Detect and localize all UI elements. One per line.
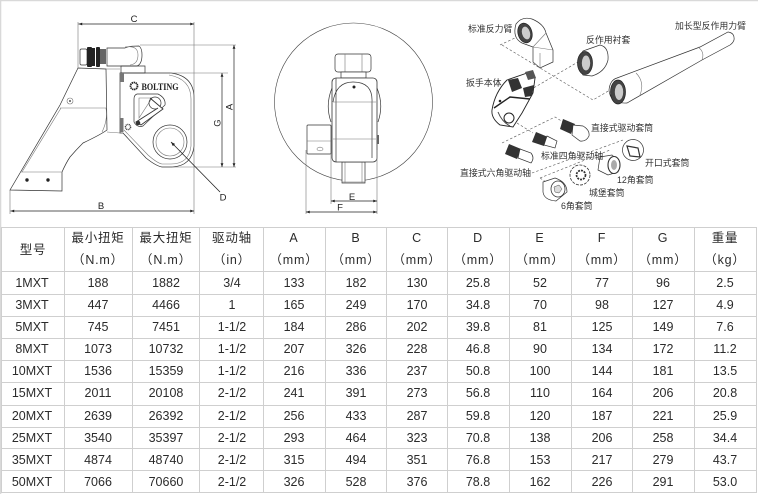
- side view drawing with swing circle: [274, 23, 432, 214]
- row 15MXT: 2-1/2: [218, 386, 246, 400]
- drive ring: [153, 125, 187, 159]
- row 20MXT: 256: [284, 409, 304, 423]
- row 8MXT: 1073: [84, 342, 112, 356]
- row 20MXT: 26392: [149, 409, 183, 423]
- table header: （mm）: [392, 253, 442, 267]
- row 15MXT: 391: [346, 386, 366, 400]
- part labels: 标准反力臂: [468, 23, 512, 34]
- table header: A: [289, 231, 299, 245]
- row 15MXT: 206: [653, 386, 673, 400]
- exploded parts diagram: [460, 18, 746, 211]
- row 35MXT: 315: [284, 453, 304, 467]
- row 3MXT: 165: [284, 298, 304, 312]
- row 15MXT: 15MXT: [12, 386, 53, 400]
- table header: [20, 230, 746, 267]
- row 25MXT: [12, 431, 737, 445]
- row 8MXT: [15, 342, 737, 356]
- row 1MXT: 96: [656, 276, 670, 290]
- row 5MXT: 39.8: [466, 320, 490, 334]
- row 25MXT: 25MXT: [12, 431, 53, 445]
- row 8MXT: 1-1/2: [218, 342, 246, 356]
- row 8MXT: 207: [284, 342, 304, 356]
- row 35MXT: 351: [407, 453, 427, 467]
- ratchet window: [125, 94, 165, 130]
- row 5MXT: 149: [653, 320, 673, 334]
- row 20MXT: 221: [653, 409, 673, 423]
- row 50MXT: 291: [653, 475, 673, 489]
- row 20MXT: 25.9: [713, 409, 737, 423]
- row 3MXT: [15, 298, 734, 312]
- side view dimensions: [306, 150, 377, 214]
- row 35MXT: 217: [592, 453, 612, 467]
- side view labels: E: [349, 192, 355, 203]
- row 35MXT: 2-1/2: [218, 453, 246, 467]
- 6 point socket: [543, 178, 567, 201]
- row 8MXT: 46.8: [466, 342, 490, 356]
- table header: G: [658, 231, 668, 245]
- table data rows: [12, 276, 737, 489]
- row 35MXT: 153: [530, 453, 550, 467]
- table header: （mm）: [515, 253, 565, 267]
- dimension labels: C: [131, 14, 138, 25]
- row 3MXT: 4466: [152, 298, 180, 312]
- row 20MXT: 20MXT: [12, 409, 53, 423]
- table header: 重量: [712, 230, 738, 245]
- row 5MXT: 81: [533, 320, 547, 334]
- row 1MXT: 182: [346, 276, 366, 290]
- open socket: [622, 140, 644, 160]
- row 10MXT: 216: [284, 364, 304, 378]
- row 25MXT: 35397: [149, 431, 183, 445]
- row 10MXT: [12, 364, 737, 378]
- wrench head: [120, 73, 194, 167]
- row 1MXT: 2.5: [716, 276, 734, 290]
- row 50MXT: 162: [530, 475, 550, 489]
- table header: （kg）: [704, 253, 746, 267]
- row 1MXT: 77: [595, 276, 609, 290]
- row 3MXT: 1: [229, 298, 236, 312]
- table header: 型号: [20, 243, 46, 257]
- row 50MXT: 7066: [84, 475, 112, 489]
- row 10MXT: 237: [407, 364, 427, 378]
- row 10MXT: 1-1/2: [218, 364, 246, 378]
- row 20MXT: 120: [530, 409, 550, 423]
- row 50MXT: 376: [407, 475, 427, 489]
- part labels: 直接式六角驱动轴: [460, 167, 531, 178]
- hydraulic cylinder and swivel: [80, 46, 145, 73]
- row 3MXT: 34.8: [466, 298, 490, 312]
- row 10MXT: 100: [530, 364, 550, 378]
- row 50MXT: 53.0: [713, 475, 737, 489]
- part labels: 开口式套筒: [645, 157, 689, 168]
- row 50MXT: 2-1/2: [218, 475, 246, 489]
- row 25MXT: 464: [346, 431, 366, 445]
- part labels: 6角套筒: [561, 200, 593, 211]
- row 3MXT: 70: [533, 298, 547, 312]
- dimension lines: [10, 22, 236, 214]
- row 50MXT: 326: [284, 475, 304, 489]
- row 3MXT: 4.9: [716, 298, 734, 312]
- row 1MXT: 130: [407, 276, 427, 290]
- table grid: [1, 227, 757, 493]
- table header: （mm）: [269, 253, 319, 267]
- table header: （mm）: [577, 253, 627, 267]
- row 35MXT: 494: [346, 453, 366, 467]
- row 5MXT: 7.6: [716, 320, 734, 334]
- row 10MXT: 336: [346, 364, 366, 378]
- drive shafts: [505, 119, 589, 163]
- row 25MXT: 138: [530, 431, 550, 445]
- row 50MXT: 528: [346, 475, 366, 489]
- side view labels: [337, 192, 355, 214]
- part labels: 加长型反作用力臂: [675, 20, 746, 31]
- row 8MXT: 134: [592, 342, 612, 356]
- row 20MXT: [12, 409, 737, 423]
- row 15MXT: 20.8: [713, 386, 737, 400]
- row 8MXT: 8MXT: [15, 342, 49, 356]
- row 8MXT: 326: [346, 342, 366, 356]
- table header: （mm）: [453, 253, 503, 267]
- dimension labels: G: [212, 119, 224, 127]
- row 8MXT: 11.2: [713, 342, 737, 356]
- row 20MXT: 2-1/2: [218, 409, 246, 423]
- row 25MXT: 34.4: [713, 431, 737, 445]
- row 15MXT: 56.8: [466, 386, 490, 400]
- row 15MXT: [12, 386, 737, 400]
- row 3MXT: 447: [88, 298, 108, 312]
- table header: F: [598, 231, 606, 245]
- table header: （N.m）: [140, 253, 192, 267]
- row 50MXT: 50MXT: [12, 475, 53, 489]
- row 10MXT: 181: [653, 364, 673, 378]
- row 10MXT: 50.8: [466, 364, 490, 378]
- row 15MXT: 2011: [85, 386, 111, 400]
- front view drawing with dimensions: [10, 14, 236, 214]
- reaction sleeve: [578, 45, 608, 76]
- part labels: [460, 20, 746, 211]
- dimension labels: [98, 14, 236, 212]
- row 10MXT: 13.5: [713, 364, 737, 378]
- table header: 最小扭矩: [71, 231, 125, 245]
- row 8MXT: 90: [533, 342, 547, 356]
- table header: （in）: [213, 253, 251, 267]
- part labels: 反作用衬套: [586, 34, 630, 45]
- table header: （mm）: [331, 253, 381, 267]
- row 8MXT: 10732: [149, 342, 183, 356]
- row 15MXT: 110: [530, 386, 550, 400]
- row 8MXT: 228: [407, 342, 427, 356]
- row 3MXT: 98: [595, 298, 609, 312]
- table header: （mm）: [638, 253, 688, 267]
- row 1MXT: 133: [284, 276, 304, 290]
- row 10MXT: 10MXT: [12, 364, 53, 378]
- wrench body: [492, 70, 536, 127]
- side view labels: F: [337, 202, 343, 214]
- row 5MXT: 286: [346, 320, 366, 334]
- standard reaction arm: [515, 18, 553, 68]
- row 5MXT: 745: [88, 320, 108, 334]
- part labels: 城堡套筒: [589, 187, 625, 198]
- row 3MXT: 170: [407, 298, 427, 312]
- dimension labels: B: [98, 201, 104, 212]
- row 20MXT: 287: [407, 409, 427, 423]
- row 3MXT: 127: [653, 298, 673, 312]
- row 50MXT: 78.8: [466, 475, 490, 489]
- row 15MXT: 273: [407, 386, 427, 400]
- row 25MXT: 3540: [84, 431, 112, 445]
- row 1MXT: 52: [533, 276, 547, 290]
- table header: E: [535, 231, 545, 245]
- row 25MXT: 293: [284, 431, 304, 445]
- row 20MXT: 433: [346, 409, 366, 423]
- row 35MXT: [12, 453, 737, 467]
- row 35MXT: 43.7: [713, 453, 737, 467]
- 12 point socket: [598, 155, 620, 175]
- part labels: 直接式驱动套筒: [591, 122, 653, 133]
- row 35MXT: 4874: [84, 453, 112, 467]
- castle socket: [570, 165, 590, 185]
- row 20MXT: 59.8: [466, 409, 490, 423]
- row 25MXT: 323: [407, 431, 427, 445]
- side view body: [307, 54, 381, 183]
- row 5MXT: 1-1/2: [218, 320, 246, 334]
- table header: （N.m）: [72, 253, 124, 267]
- part labels: 12角套筒: [617, 174, 654, 185]
- row 1MXT: 1882: [152, 276, 180, 290]
- specification table: [1, 227, 757, 493]
- part labels: 扳手本体: [466, 77, 502, 88]
- row 15MXT: 20108: [149, 386, 183, 400]
- row 3MXT: 249: [346, 298, 366, 312]
- logo: BOLTING: BOLTING: [142, 82, 178, 92]
- row 50MXT: [12, 475, 737, 489]
- table header: C: [412, 231, 422, 245]
- row 5MXT: 202: [407, 320, 427, 334]
- row 15MXT: 241: [284, 386, 304, 400]
- row 15MXT: 164: [592, 386, 612, 400]
- dimension labels: A: [224, 103, 236, 110]
- table header: 驱动轴: [212, 230, 252, 245]
- table header: 最大扭矩: [139, 231, 193, 245]
- extended reaction arm: [609, 32, 734, 104]
- row 35MXT: 279: [653, 453, 673, 467]
- reaction arm: [10, 68, 120, 191]
- row 35MXT: 76.8: [466, 453, 490, 467]
- row 50MXT: 70660: [149, 475, 183, 489]
- assembly dashed guides: [500, 37, 623, 186]
- row 35MXT: 35MXT: [12, 453, 53, 467]
- row 5MXT: 125: [592, 320, 612, 334]
- row 10MXT: 144: [592, 364, 612, 378]
- part labels: 标准四角驱动轴: [541, 150, 603, 161]
- row 25MXT: 2-1/2: [218, 431, 246, 445]
- row 20MXT: 187: [592, 409, 612, 423]
- table header: D: [473, 231, 483, 245]
- row 10MXT: 1536: [84, 364, 112, 378]
- row 25MXT: 206: [592, 431, 612, 445]
- row 5MXT: 7451: [152, 320, 180, 334]
- table header: B: [351, 231, 361, 245]
- row 50MXT: 226: [592, 475, 612, 489]
- row 20MXT: 2639: [84, 409, 112, 423]
- row 1MXT: 1MXT: [15, 276, 49, 290]
- row 1MXT: 188: [88, 276, 108, 290]
- row 1MXT: [15, 276, 734, 290]
- row 25MXT: 258: [653, 431, 673, 445]
- row 8MXT: 172: [653, 342, 673, 356]
- row 1MXT: 3/4: [223, 276, 241, 290]
- row 25MXT: 70.8: [466, 431, 490, 445]
- sockets: [543, 140, 644, 201]
- row 3MXT: 3MXT: [15, 298, 49, 312]
- row 1MXT: 25.8: [466, 276, 490, 290]
- row 10MXT: 15359: [149, 364, 183, 378]
- dimension labels: D: [220, 192, 227, 204]
- row 35MXT: 48740: [149, 453, 183, 467]
- row 5MXT: 5MXT: [15, 320, 49, 334]
- row 5MXT: 184: [284, 320, 304, 334]
- row 5MXT: [15, 320, 734, 334]
